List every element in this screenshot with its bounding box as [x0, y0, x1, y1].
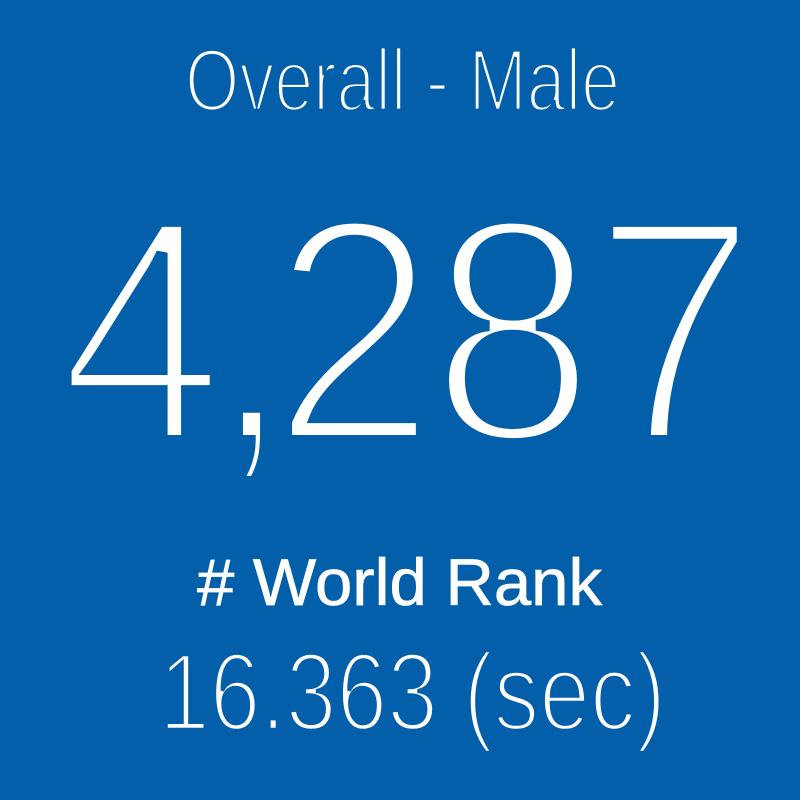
title: Overall - Male — [185, 30, 620, 130]
time value: 16.363 (sec) — [159, 631, 666, 754]
label: world rank: # World Rank — [197, 545, 603, 619]
big number: world rank value: 4,287 — [59, 152, 757, 510]
